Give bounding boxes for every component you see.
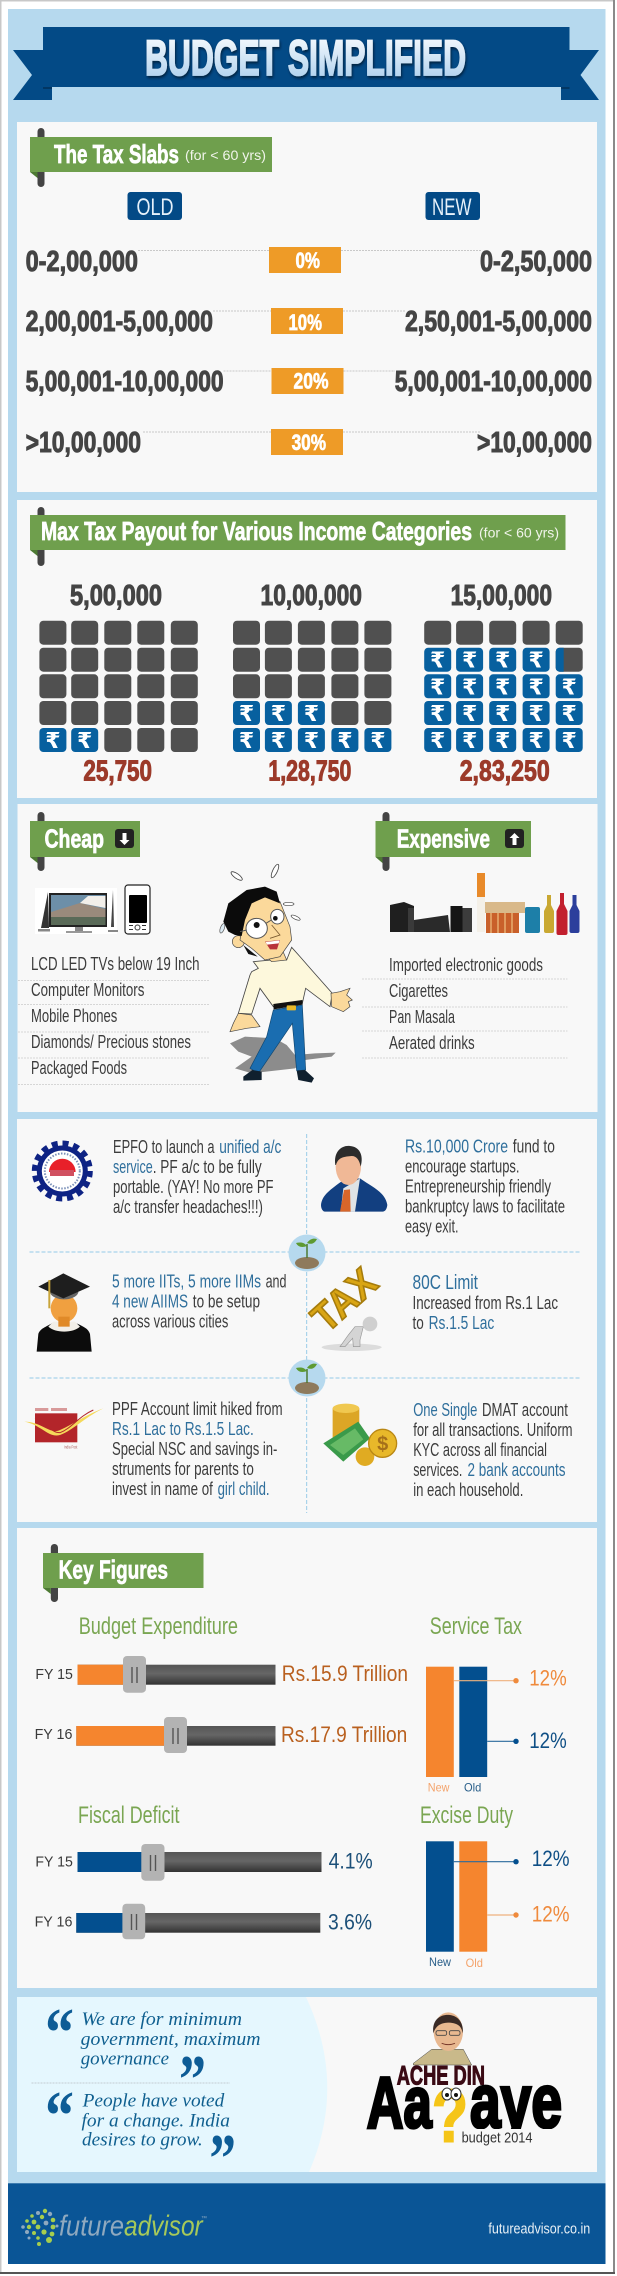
- chart: excise duty: 12%: [532, 1846, 570, 1871]
- income 15,00,000 column: ₹: [430, 729, 445, 754]
- text: DMAT: One Single: [413, 1399, 477, 1420]
- slab row 10 percent: 10%: [288, 310, 322, 335]
- quote: voted for a change: ”: [209, 2121, 236, 2198]
- mask below the wordmark: [470, 2129, 565, 2151]
- heading: the tax slabs: [30, 128, 272, 187]
- chart: excise duty: Old: [466, 1956, 483, 1970]
- income 15,00,000 column: ₹: [528, 729, 544, 754]
- slab row 0 percent: 0%: [296, 248, 320, 273]
- icon: businessman: [321, 1146, 387, 1212]
- icon: yellow bottle: [544, 895, 554, 933]
- icon: expensive goods: [390, 873, 580, 935]
- wordmark: budget 2014: budget 2014: [462, 2130, 532, 2147]
- text: 80C limit: Rs.1.5 Lac: [429, 1312, 494, 1333]
- slider: FY 16 expenditure: Rs.17.9 Trillion: [281, 1722, 407, 1747]
- text: institutes: and: [266, 1271, 286, 1292]
- text: 80C limit: Increased from Rs.1 Lac: [412, 1292, 558, 1313]
- list: expensive items: Cigarettes: [389, 980, 448, 1001]
- income 15,00,000 column: ₹: [528, 649, 544, 674]
- icon: televisions and phone: [35, 885, 150, 934]
- slider: FY 15 deficit: [35, 1844, 373, 1881]
- chart: service tax: Service Tax: [430, 1613, 522, 1640]
- income 15,00,000 column: ₹: [495, 649, 510, 674]
- text: PPF: Rs.1 Lac to Rs.1.5 Lac.: [112, 1418, 254, 1439]
- icon: red bottle: [556, 893, 568, 935]
- income 15,00,000 column: ₹: [562, 702, 577, 727]
- income 5,00,000 column: [39, 580, 198, 788]
- list: cheap items: Packaged Foods: [31, 1057, 127, 1078]
- icon: India Post logo: India Post: [64, 1444, 78, 1449]
- icon: stereo system: [390, 902, 472, 932]
- logo: futureadvisor: future: [59, 2211, 124, 2243]
- heading: cheap: Cheap: [44, 824, 104, 854]
- footer: [8, 2183, 606, 2264]
- text: EPFO: a/c transfer headaches!!!): [113, 1196, 263, 1217]
- portrait: [413, 2012, 472, 2065]
- icon: mobile phone: [125, 885, 150, 934]
- income 15,00,000 column: 2,83,250: [460, 756, 550, 788]
- income 5,00,000 column: ₹: [45, 729, 61, 754]
- icon: plant on coins: [288, 1360, 326, 1396]
- income 10,00,000 column: 10,00,000: [260, 580, 362, 612]
- slider: FY 16 expenditure: [35, 1717, 407, 1753]
- heading: the tax slabs: The Tax Slabs: [54, 139, 179, 169]
- text: EPFO: portable. (YAY! No more PF: [113, 1176, 274, 1197]
- income 15,00,000 column: ₹: [462, 649, 477, 674]
- chart: budget expenditure: Budget Expenditure: [79, 1613, 238, 1640]
- income 15,00,000 column: ₹: [462, 675, 477, 700]
- income 15,00,000 column: ₹: [495, 675, 510, 700]
- list: cheap items: [18, 953, 210, 1084]
- panel: max tax payout: [17, 500, 597, 798]
- quote: minimum government: “: [45, 1995, 74, 2072]
- income 10,00,000 column: ₹: [304, 702, 319, 727]
- income 5,00,000 column: 5,00,000: [70, 580, 162, 612]
- income 10,00,000 column: 1,28,750: [268, 756, 351, 788]
- text: DMAT: KYC across all financial: [413, 1439, 547, 1460]
- income 15,00,000 column: ₹: [562, 675, 577, 700]
- heading: expensive: [376, 812, 531, 871]
- slab row 0 percent: 0-2,00,000: [26, 246, 138, 278]
- heading: expensive: Expensive: [397, 824, 490, 854]
- income 15,00,000 column: ₹: [495, 702, 510, 727]
- slab row 10 percent: [26, 306, 592, 338]
- list: cheap items: Diamonds/ Precious stones: [31, 1031, 191, 1052]
- slab row 30 percent: 30%: [292, 430, 326, 455]
- slider: FY 16 deficit: [35, 1904, 372, 1939]
- text: institutes: to be setup: [193, 1291, 260, 1312]
- text: PPF: Special NSC and savings in-: [112, 1438, 277, 1459]
- website url: futureadvisor.co.in: [488, 2220, 590, 2237]
- heading: max tax payout: [30, 507, 566, 566]
- icon: India Post logo: [24, 1408, 103, 1449]
- text: startups: [405, 1136, 565, 1237]
- income 15,00,000 column: [424, 580, 583, 788]
- quote: voted for a change: for a change. India: [82, 2111, 230, 2132]
- text: institutes: across various cities: [112, 1311, 228, 1332]
- income 15,00,000 column: ₹: [495, 729, 510, 754]
- slider: FY 15 deficit: 4.1%: [329, 1848, 373, 1873]
- income 15,00,000 column: ₹: [430, 649, 445, 674]
- chart: excise duty: New: [429, 1955, 451, 1969]
- slab row 0 percent: [26, 246, 592, 278]
- heading: key figures: Key Figures: [59, 1554, 168, 1584]
- text: PPF: PPF Account limit hiked from: [112, 1398, 283, 1419]
- income 15,00,000 column: ₹: [462, 702, 477, 727]
- quote: voted for a change: desires to grow.: [82, 2130, 203, 2151]
- icon: cigarette and carton: [477, 873, 525, 933]
- text: institutes: 5 more IITs, 5 more IIMs: [112, 1271, 261, 1292]
- income 15,00,000 column: ₹: [528, 702, 544, 727]
- income 10,00,000 column: ₹: [304, 729, 319, 754]
- icon: graduate: [37, 1273, 92, 1352]
- text: PPF: [112, 1398, 283, 1499]
- wordmark: aye: aye: [470, 2059, 562, 2144]
- quote: minimum government: ”: [179, 2042, 206, 2119]
- chart: service tax: Old: [464, 1781, 481, 1795]
- income 10,00,000 column: ₹: [271, 729, 286, 754]
- text: startups: easy exit.: [405, 1216, 458, 1237]
- quote: voted for a change: People have voted: [82, 2091, 225, 2112]
- income 15,00,000 column: ₹: [430, 675, 445, 700]
- logo dots: [21, 2209, 58, 2246]
- slab row 30 percent: [26, 427, 592, 459]
- list: cheap items: LCD LED TVs below 19 Inch: [31, 953, 200, 974]
- icon: blue bottle: [570, 895, 580, 933]
- wordmark: question mark: ?: [432, 2074, 468, 2158]
- text: PPF: girl child.: [218, 1478, 270, 1499]
- income 15,00,000 column: ₹: [528, 675, 544, 700]
- slab row 20 percent: 5,00,001-10,00,000: [26, 366, 224, 398]
- icon: coins and cash: [323, 1404, 397, 1466]
- list: expensive items: Pan Masala: [389, 1006, 455, 1027]
- logo: futureadvisor: ™: [201, 2215, 207, 2222]
- income 10,00,000 column: ₹: [271, 702, 286, 727]
- income 15,00,000 column: ₹: [562, 729, 577, 754]
- text: startups: Rs.10,000 Crore: [405, 1136, 508, 1157]
- chart: service tax: 12%: [529, 1666, 567, 1691]
- title banner: [13, 27, 599, 100]
- income 5,00,000 column: ₹: [77, 729, 92, 754]
- income 15,00,000 column: 15,00,000: [451, 580, 552, 612]
- text: DMAT: DMAT account: [482, 1399, 568, 1420]
- text: startups: encourage startups.: [405, 1156, 520, 1177]
- text: EPFO: unified a/c: [219, 1136, 281, 1157]
- income 10,00,000 column: ₹: [370, 729, 386, 754]
- text: EPFO: . PF a/c to be fully: [153, 1156, 262, 1177]
- slab row 20 percent: 20%: [294, 368, 328, 394]
- label: new: NEW: [432, 194, 472, 221]
- heading: key figures: [43, 1544, 204, 1602]
- income 10,00,000 column: [233, 580, 391, 788]
- text: startups: Entrepreneurship friendly: [405, 1176, 552, 1197]
- text: 80C limit: [412, 1272, 558, 1333]
- quote: minimum government: governance: [81, 2048, 169, 2069]
- quote: minimum government: government, maximum: [81, 2029, 260, 2050]
- slab row 10 percent: 2,00,001-5,00,000: [26, 306, 213, 338]
- list: cheap items: Mobile Phones: [31, 1005, 117, 1026]
- quote: minimum government: We are for minimum: [82, 2009, 242, 2030]
- text: startups: fund to: [513, 1136, 555, 1157]
- chart: budget expenditure: [35, 1613, 408, 1753]
- panel: the tax slabs: [17, 122, 597, 492]
- chart: service tax: New: [428, 1781, 450, 1795]
- text: EPFO: service: [113, 1156, 153, 1177]
- slider: FY 15 expenditure: Rs.15.9 Trillion: [282, 1661, 408, 1686]
- icon: drinks can: [525, 907, 540, 933]
- text: EPFO: [113, 1136, 281, 1217]
- logo: futureadvisor: advisor: [124, 2211, 204, 2243]
- text: DMAT: 2 bank accounts: [468, 1459, 566, 1480]
- text: institutes: [112, 1271, 286, 1332]
- text: 80C limit: to: [412, 1312, 424, 1333]
- illustration: ache din aa gaye: [367, 2012, 565, 2158]
- slider: FY 16 deficit: 3.6%: [328, 1909, 372, 1934]
- chart: fiscal deficit: Fiscal Deficit: [78, 1802, 180, 1829]
- slab row 0 percent: 0-2,50,000: [480, 246, 592, 278]
- illustration: worried man: [219, 863, 352, 1083]
- list: expensive items: [362, 954, 568, 1058]
- text: PPF: struments for parents to: [112, 1458, 254, 1479]
- icon: tax burden: TAX: [303, 1260, 386, 1341]
- quote: voted for a change: “: [45, 2078, 74, 2155]
- logo: futureadvisor: [21, 2209, 207, 2246]
- income 10,00,000 column: ₹: [239, 729, 254, 754]
- icon: coins and cash: $: [377, 1434, 388, 1456]
- heading: cheap: [30, 812, 140, 871]
- slider: FY 16 deficit: FY 16: [35, 1914, 72, 1931]
- income 5,00,000 column: 25,750: [83, 756, 152, 788]
- panel: quotes and cartoon: [17, 1995, 597, 2198]
- text: institutes: 4 new AIIMS: [112, 1291, 188, 1312]
- heading: max tax payout: Max Tax Payout for Various Income Categories: [41, 516, 472, 546]
- quote: minimum government: [45, 1995, 260, 2119]
- list: expensive items: Aerated drinks: [389, 1032, 475, 1053]
- text: 80C limit: 80C Limit: [412, 1272, 478, 1294]
- chart: excise duty: Excise Duty: [420, 1802, 513, 1829]
- text: DMAT: [413, 1399, 573, 1500]
- panel: cheap and expensive: [18, 804, 598, 1112]
- panel: key figures: [17, 1528, 597, 1988]
- text: PPF: invest in name of: [112, 1478, 214, 1499]
- income 10,00,000 column: ₹: [239, 702, 254, 727]
- chart: fiscal deficit: [35, 1802, 373, 1939]
- text: DMAT: in each household.: [413, 1479, 523, 1500]
- slab row 30 percent: >10,00,000: [26, 427, 141, 459]
- label: old: OLD: [136, 194, 174, 221]
- text: DMAT: services.: [413, 1459, 462, 1480]
- chart: service tax: 12%: [529, 1728, 567, 1753]
- income 15,00,000 column: ₹: [430, 702, 445, 727]
- chart: excise duty: [420, 1802, 570, 1970]
- chart: service tax: [426, 1613, 567, 1795]
- slider: FY 15 expenditure: [35, 1656, 408, 1693]
- list: cheap items: Computer Monitors: [31, 979, 144, 1000]
- icon: EPFO emblem: [35, 1144, 90, 1198]
- text: EPFO: EPFO to launch a: [113, 1136, 215, 1157]
- wordmark: aa: Aa: [367, 2063, 432, 2143]
- slab row 20 percent: [26, 366, 592, 398]
- quote: voted for a change: [45, 2078, 236, 2198]
- slider: FY 15 expenditure: FY 15: [35, 1666, 73, 1683]
- slider: FY 16 expenditure: FY 16: [35, 1726, 72, 1743]
- list: expensive items: Imported electronic goods: [389, 954, 543, 975]
- wordmark: ache din: ACHE DIN: [397, 2060, 485, 2090]
- panel: budget highlights: [17, 1119, 597, 1522]
- slider: FY 15 deficit: FY 15: [35, 1854, 73, 1871]
- chart: excise duty: 12%: [532, 1902, 570, 1927]
- heading: max tax payout: (for < 60 yrs): [479, 524, 559, 540]
- heading: the tax slabs: (for < 60 yrs): [185, 147, 266, 163]
- income 15,00,000 column: ₹: [462, 729, 477, 754]
- income 10,00,000 column: ₹: [337, 729, 353, 754]
- icon: plant on coins: [288, 1234, 326, 1272]
